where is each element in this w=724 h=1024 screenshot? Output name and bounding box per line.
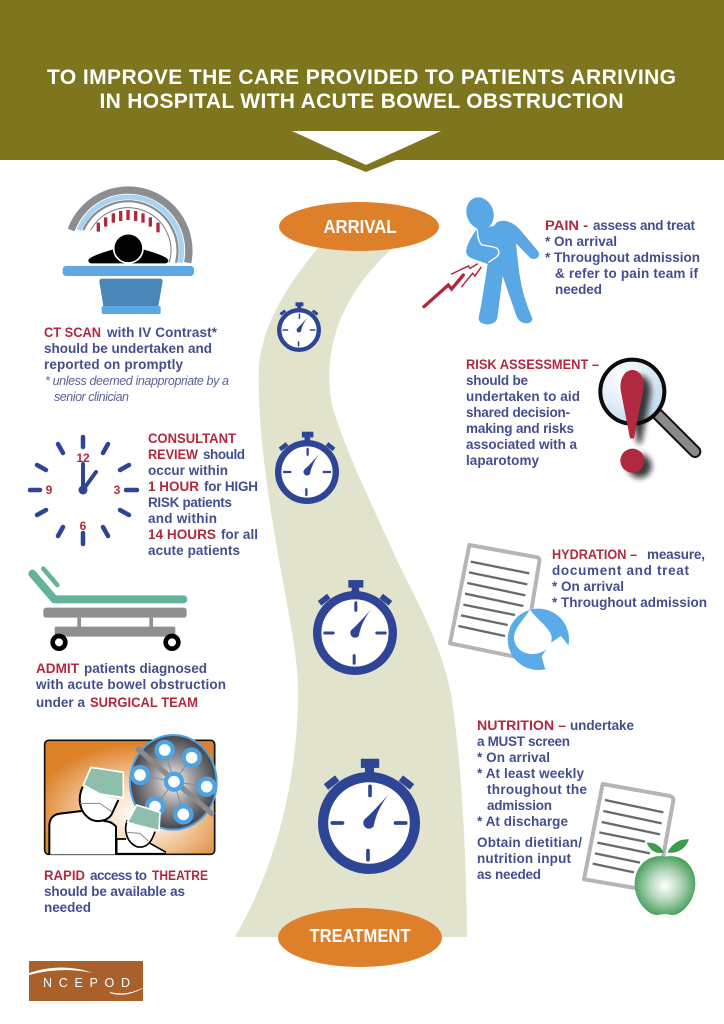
icon: nutrition chart with apple [584,784,695,915]
text: hydration: * On arrival [552,579,624,594]
text: hydration: * Throughout admission [552,595,707,610]
treatment oval: TREATMENT [310,926,411,946]
text: CT scan: * unless deemed inappropriate by a [45,374,229,388]
apple [635,839,695,915]
text: admit: under a [36,695,85,710]
icon: magnifier with exclamation [600,360,695,478]
text: risk assessment: laparotomy [466,453,539,468]
title: IN HOSPITAL WITH ACUTE BOWEL OBSTRUCTION [100,90,624,113]
text: nutrition: NUTRITION – [477,718,567,733]
document [584,784,673,892]
icon: CT scanner [63,190,194,314]
clock numerals: 6 [80,519,87,533]
text: risk assessment: RISK ASSESSMENT – [466,357,599,372]
text: hydration: document and treat [552,563,690,578]
text: pain: * On arrival [545,234,617,249]
text: nutrition: admission [487,798,552,813]
text: rapid access [44,868,208,915]
text: nutrition: * At least weekly [477,766,584,781]
treatment oval [278,908,442,967]
text: risk assessment [466,357,599,468]
text: consultant review: should [203,447,245,462]
stopwatch 1 [279,302,319,350]
text: consultant review: CONSULTANT [148,431,237,446]
clock numerals: 3 [114,483,121,497]
text: nutrition [477,718,634,882]
surgeon 1 [49,767,123,854]
text: consultant review: 1 HOUR [148,479,199,494]
arrival oval [279,202,439,251]
clock numerals: 9 [46,483,53,497]
text: consultant review: for all [221,527,258,542]
header chevron [292,131,441,172]
text: risk assessment: undertaken to aid [466,389,580,404]
text: rapid access: access to [90,868,147,883]
text: consultant review: REVIEW [148,447,198,462]
clock numerals: 12 [76,451,90,465]
text: admit: ADMIT [36,661,80,676]
text: consultant review: 14 HOURS [148,527,216,542]
icon: clock [30,437,137,544]
text: CT scan: CT SCAN [44,325,101,340]
title: TO IMPROVE THE CARE PROVIDED TO PATIENTS ARRIVING [47,66,676,89]
icon: person in pain [424,193,539,324]
logo: NCEPOD: NCEPOD [43,976,130,990]
text: CT scan: senior clinician [54,390,129,404]
stopwatch 4 [323,759,415,869]
text: pain: needed [555,282,602,297]
text: rapid access: RAPID [44,868,85,883]
text: pain: & refer to pain team if [555,266,698,281]
pathway band [235,248,467,937]
text: nutrition: Obtain dietitian/ [477,835,582,850]
text: nutrition: throughout the [487,782,587,797]
text: pain: PAIN - [545,218,588,233]
text: admit: with acute bowel obstruction [35,677,226,692]
pain lightning [424,264,481,307]
text: risk assessment: associated with a [466,437,577,452]
text: rapid access: THEATRE [152,868,208,883]
text: hydration [552,547,707,610]
text: nutrition: * At discharge [477,814,568,829]
water drop [508,609,572,672]
text: rapid access: should be available as [44,884,185,899]
text: CT scan: with IV Contrast* [106,325,218,340]
text: rapid access: needed [44,900,91,915]
text: nutrition: nutrition input [477,851,572,866]
icon: hospital bed [32,569,187,649]
stopwatch 3 [317,580,393,671]
text: nutrition: undertake [570,718,634,733]
icon: hydration chart [450,545,572,672]
text: risk assessment: should be [466,373,528,388]
clock numerals [46,451,121,533]
text: consultant review [148,431,258,558]
icon: theatre scene [45,735,217,854]
text: admit: SURGICAL TEAM [90,695,198,710]
theatre lamp [130,735,217,830]
text: CT scan: should be undertaken and [44,341,212,356]
arrival oval: ARRIVAL [324,217,396,237]
document [450,545,539,658]
logo: NCEPOD [29,961,148,1001]
text: risk assessment: shared decision- [466,405,570,420]
text: consultant review: and within [148,511,217,526]
title [47,66,676,113]
text: consultant review: for HIGH [204,479,258,494]
text: nutrition: * On arrival [477,750,550,765]
text: nutrition: a MUST screen [477,734,570,749]
text: consultant review: RISK patients [148,495,232,510]
text: consultant review: acute patients [148,543,240,558]
surgeon 2 [117,805,166,854]
text: consultant review: occur within [148,463,228,478]
text: admit [35,661,226,710]
text: admit: patients diagnosed [84,661,207,676]
text: hydration: HYDRATION – [552,547,637,562]
text: pain [545,218,700,297]
text: hydration: measure, [647,547,705,562]
text: nutrition: as needed [477,867,541,882]
text: risk assessment: making and risks [466,421,574,436]
header banner [0,0,724,172]
text: CT scan [44,325,229,404]
text: pain: assess and treat [593,218,696,233]
stopwatch 2 [278,432,336,501]
text: CT scan: reported on promptly [44,357,183,372]
text: pain: * Throughout admission [545,250,700,265]
